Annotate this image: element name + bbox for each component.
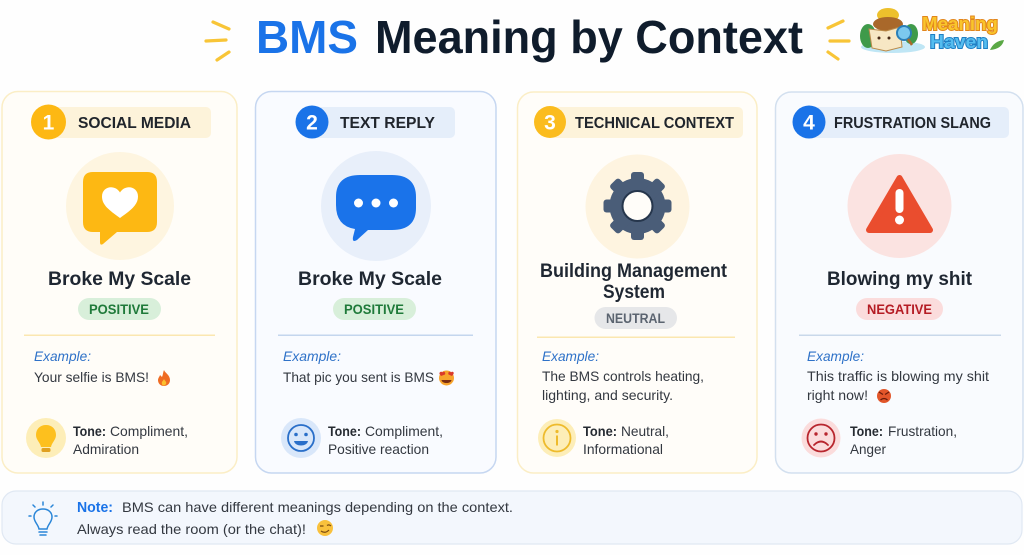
icon: heart speech bubble	[66, 152, 174, 260]
tone: compliment: Admiration	[73, 441, 139, 457]
note text: Note:	[77, 500, 113, 516]
tone: informational: Neutral,	[621, 423, 669, 439]
card heading: frustration slang: FRUSTRATION SLANG	[834, 115, 991, 132]
example text	[283, 348, 454, 386]
card heading: text reply: 2	[306, 112, 318, 134]
badge: positive	[333, 298, 416, 320]
tone: informational: Informational	[583, 441, 663, 457]
logo: Meaning Haven	[860, 8, 1004, 53]
badge: positive: POSITIVE	[344, 302, 404, 317]
meaning name: Broke My Scale	[48, 268, 191, 290]
logo: Meaning Haven: Meaning	[922, 14, 998, 34]
badge: positive	[78, 298, 161, 320]
tone: frustration: Frustration,	[888, 423, 957, 439]
icon: light bulb outline	[29, 502, 57, 535]
panel: social media	[2, 92, 237, 473]
tone: positive reaction: Positive reaction	[328, 441, 429, 457]
badge: negative: NEGATIVE	[867, 302, 932, 317]
example text: Example:	[283, 348, 341, 364]
panel: technical context	[518, 92, 757, 473]
title: Meaning by Context	[375, 11, 803, 63]
tone: frustration: Tone:	[850, 423, 883, 439]
badge: negative	[856, 298, 943, 320]
tone: compliment: Tone:	[73, 423, 106, 439]
note text	[77, 499, 513, 537]
title: BMS	[256, 11, 358, 63]
card heading: social media	[31, 104, 211, 140]
meaning name	[540, 260, 727, 303]
card heading: frustration slang	[792, 106, 1009, 138]
meaning name: Building Management	[540, 260, 727, 282]
card heading: social media: 1	[43, 112, 55, 134]
tone: frustration	[802, 418, 957, 458]
badge: neutral	[594, 307, 677, 329]
example text: Example:	[34, 348, 91, 364]
tone: informational: Tone:	[583, 423, 617, 439]
example text: lighting, and security.	[542, 387, 673, 403]
card heading: text reply: TEXT REPLY	[340, 115, 436, 132]
example text	[542, 348, 704, 403]
example text: right now!	[807, 387, 868, 403]
panel: note	[2, 491, 1022, 544]
icon: left title sparks	[206, 22, 229, 60]
icon: winking emoji	[317, 520, 333, 536]
tone: informational	[538, 419, 669, 457]
meaning name: Blowing my shit	[827, 268, 972, 290]
example text: Your selfie is BMS!	[34, 369, 149, 385]
logo: Meaning Haven: Haven	[930, 32, 988, 52]
example text: That pic you sent is BMS	[283, 369, 434, 385]
tone: compliment: Compliment,	[110, 423, 188, 439]
card heading: technical context: TECHNICAL CONTEXT	[575, 115, 734, 132]
meaning name: Broke My Scale	[298, 268, 442, 290]
example text	[807, 348, 989, 403]
card heading: technical context	[534, 106, 743, 138]
note text: Always read the room (or the chat)!	[77, 521, 306, 537]
card heading: social media: SOCIAL MEDIA	[78, 115, 191, 132]
example text: The BMS controls heating,	[542, 368, 704, 384]
example text: Example:	[807, 348, 864, 364]
tone: positive reaction	[281, 418, 443, 458]
tone: frustration: Anger	[850, 441, 886, 457]
example text: Example:	[542, 348, 599, 364]
example text: This traffic is blowing my shit	[807, 368, 989, 384]
note text: BMS can have different meanings depending on the context.	[122, 499, 513, 515]
panel: text reply	[256, 92, 496, 473]
tone: positive reaction: Tone:	[328, 423, 361, 439]
badge: neutral: NEUTRAL	[606, 311, 665, 326]
icon: gear	[586, 154, 690, 258]
badge: positive: POSITIVE	[89, 302, 149, 317]
icon: right title sparks	[828, 21, 849, 59]
example text	[34, 348, 170, 386]
icon: chat bubble	[321, 151, 431, 261]
icon: warning triangle	[848, 154, 952, 258]
card heading: frustration slang: 4	[803, 112, 815, 134]
panel: frustration slang	[776, 92, 1023, 473]
tone: positive reaction: Compliment,	[365, 423, 443, 439]
meaning name: System	[603, 281, 665, 303]
card heading: text reply	[296, 106, 455, 138]
card heading: technical context: 3	[544, 112, 556, 134]
tone: compliment	[26, 418, 188, 458]
